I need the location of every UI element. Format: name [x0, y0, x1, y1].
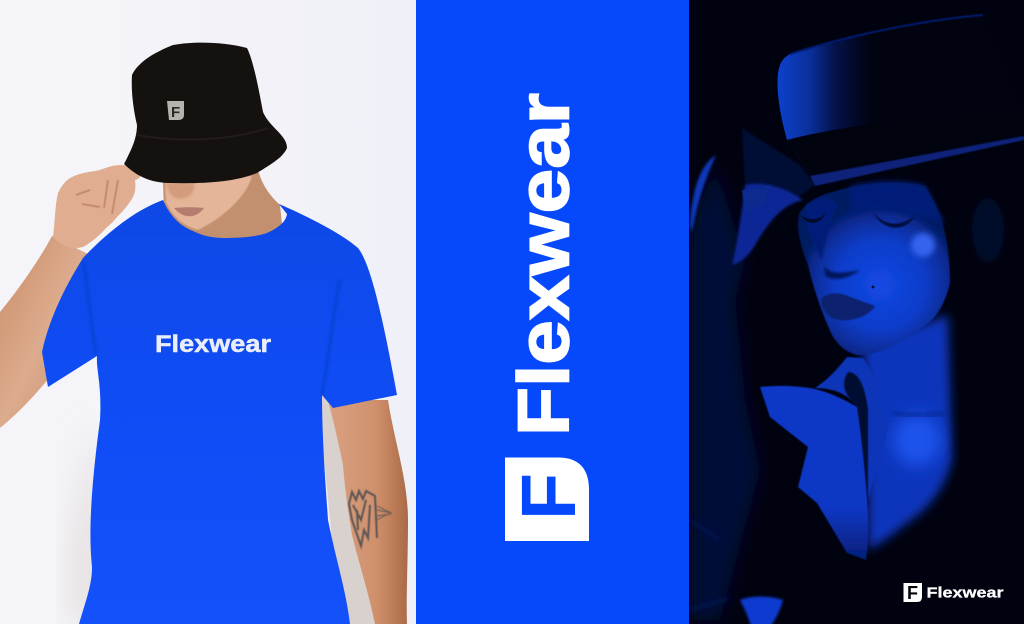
tattoo: [349, 491, 392, 546]
lips: [821, 293, 875, 320]
lower face: [165, 176, 252, 230]
panel: blue brand column: [416, 0, 689, 624]
brow shade under the brim: [850, 182, 945, 225]
neck: [163, 172, 282, 238]
bucket hat: [124, 43, 287, 183]
shirt wordmark: Flexwear: [155, 331, 271, 358]
ear and hair: [972, 198, 1004, 262]
collarbone crease: [892, 412, 946, 416]
t-shirt: [42, 200, 397, 624]
nose: [166, 183, 194, 199]
dark hand top: [742, 128, 815, 200]
lower jacket glow: [740, 597, 783, 624]
small logo letter: F: [907, 583, 918, 603]
hat band: [787, 107, 1024, 180]
beauty mark: [872, 286, 874, 288]
hand gripping the brim: [53, 165, 141, 248]
raised arm, faint rim light: [690, 165, 760, 620]
cheek highlight: [911, 233, 935, 257]
logo letter: F: [506, 473, 592, 520]
vertical wordmark: Flexwear: [504, 93, 584, 436]
small wordmark: Flexwear: [926, 584, 1004, 602]
nose shadow: [824, 266, 860, 279]
sleeve seam shadow: [84, 262, 340, 395]
logo lockup: [904, 583, 1004, 603]
photo background: [0, 0, 416, 624]
face: [798, 183, 950, 355]
hat rim light: [790, 15, 983, 54]
mouth: [174, 207, 204, 216]
arm edge highlight: [690, 155, 716, 232]
hat badge: [167, 101, 184, 121]
wall shadow behind the shirt: [73, 430, 100, 624]
shaded eye socket and nose bridge: [806, 198, 838, 260]
left eye: [800, 212, 826, 223]
dark neckline shadow: [844, 372, 868, 510]
top hat crown: [777, 15, 1024, 180]
dress shadow streak: [690, 520, 730, 610]
closed eye: [873, 213, 915, 228]
hat badge letter: F: [171, 104, 180, 121]
dark photo background: [689, 0, 1024, 624]
logo mark: [505, 458, 592, 541]
panel: man in bucket hat and blue t-shirt: [0, 0, 416, 624]
jacket lapel: [760, 386, 868, 560]
left forearm: [0, 236, 90, 428]
neck and chest glow: [862, 315, 952, 550]
finger creases: [76, 180, 118, 214]
hat brim stitching: [137, 128, 268, 140]
neck collar highlight: [815, 357, 890, 500]
right forearm: [328, 400, 408, 624]
lit palm: [732, 184, 803, 265]
panel: woman in hat, blue duotone: [689, 0, 1024, 624]
finger texture: [742, 184, 770, 204]
wall shadow by the arm: [322, 395, 375, 624]
chest highlight: [893, 414, 941, 466]
hat brim highlight: [810, 136, 1024, 186]
